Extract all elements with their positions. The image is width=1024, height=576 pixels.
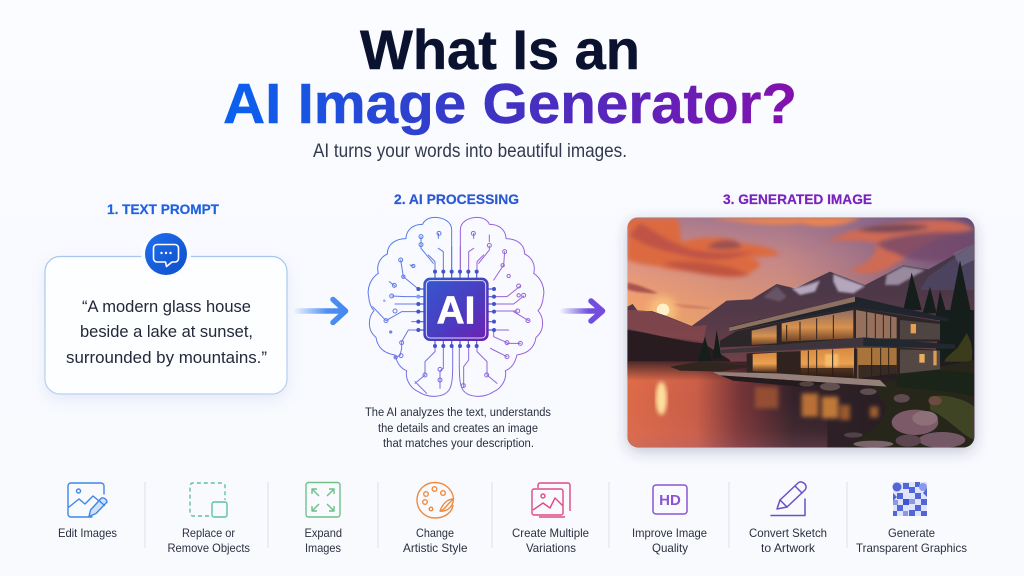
shore vegetation [670, 362, 753, 372]
icon: chat bubble [141, 229, 191, 279]
title: What Is an [360, 18, 640, 81]
processing description: that matches your description. [383, 438, 534, 450]
label [512, 526, 589, 555]
brain and chip diagram [368, 217, 544, 396]
image frame shadow [628, 218, 974, 448]
subtitle: AI turns your words into beautiful images. [313, 140, 627, 162]
image: lake house at sunset [627, 217, 974, 448]
prompt text [66, 297, 267, 367]
prompt text: surrounded by mountains.” [66, 348, 267, 367]
house [720, 307, 940, 347]
label [304, 526, 342, 555]
label: Create Multiple [512, 526, 589, 540]
right shore [847, 360, 974, 448]
label: Edit Images [58, 526, 117, 540]
trees [697, 260, 974, 370]
prompt text: beside a lake at sunset, [80, 322, 253, 341]
sun [649, 296, 677, 324]
prompt card [45, 256, 287, 394]
label: Artistic Style [403, 541, 468, 555]
label: to Artwork [761, 541, 816, 555]
label: Generate [888, 526, 935, 540]
label: Improve Image [632, 526, 707, 540]
icon: dashed selection [190, 483, 227, 517]
label: Variations [526, 541, 576, 555]
lake [627, 362, 974, 448]
dividers [145, 482, 847, 548]
feature: convert sketch to artwork [749, 482, 827, 555]
processing description [365, 407, 551, 450]
label: Quality [652, 541, 688, 555]
label [856, 526, 967, 555]
heading: text prompt: 1. TEXT PROMPT [107, 201, 219, 217]
label: Transparent Graphics [856, 541, 967, 555]
feature: replace or remove objects [168, 483, 250, 555]
label: Replace or [182, 526, 235, 540]
feature: improve image quality [632, 485, 707, 555]
arrow: prompt to processing [297, 300, 346, 322]
title [223, 18, 797, 136]
dock [713, 372, 887, 387]
panel: generated image [627, 191, 974, 448]
icon: transparency pattern [892, 482, 927, 516]
panel: AI processing [365, 191, 551, 450]
label: Convert Sketch [749, 526, 827, 540]
icon: HD: HD [659, 492, 681, 509]
arrow: processing to image [563, 301, 602, 321]
prompt text: “A modern glass house [82, 297, 251, 316]
label: Remove Objects [168, 541, 250, 555]
clouds [627, 217, 974, 277]
processing description: The AI analyzes the text, understands [365, 407, 551, 419]
label [168, 526, 250, 555]
panel: text prompt [45, 201, 287, 394]
feature: create multiple variations [512, 483, 589, 555]
heading: generated image: 3. GENERATED IMAGE [723, 191, 872, 207]
mountains [627, 244, 974, 377]
icon: expand arrows [306, 482, 340, 517]
label: Change [416, 526, 454, 540]
icon: pencil sketch [771, 482, 806, 516]
label: Images [305, 541, 341, 555]
chip [423, 278, 489, 341]
processing description: the details and creates an image [378, 423, 538, 435]
chip pins [418, 272, 494, 346]
label [749, 526, 827, 555]
left hemisphere [368, 217, 453, 396]
label: Expand [304, 526, 342, 540]
icon: palette [417, 482, 454, 518]
heading: AI processing: 2. AI PROCESSING [394, 191, 519, 207]
rocks [892, 410, 938, 435]
left dark hills [627, 330, 730, 367]
title: AI Image Generator? [223, 72, 797, 136]
label [632, 526, 707, 555]
right hemisphere [459, 217, 544, 396]
feature: change artistic style [403, 482, 468, 555]
label [403, 526, 468, 555]
chip label: AI [437, 289, 475, 332]
icon: image with pencil [68, 483, 107, 517]
feature: generate transparent graphics [856, 482, 967, 555]
feature: expand images [304, 482, 342, 555]
icon: stacked images [532, 483, 570, 517]
feature: edit images [58, 483, 117, 540]
